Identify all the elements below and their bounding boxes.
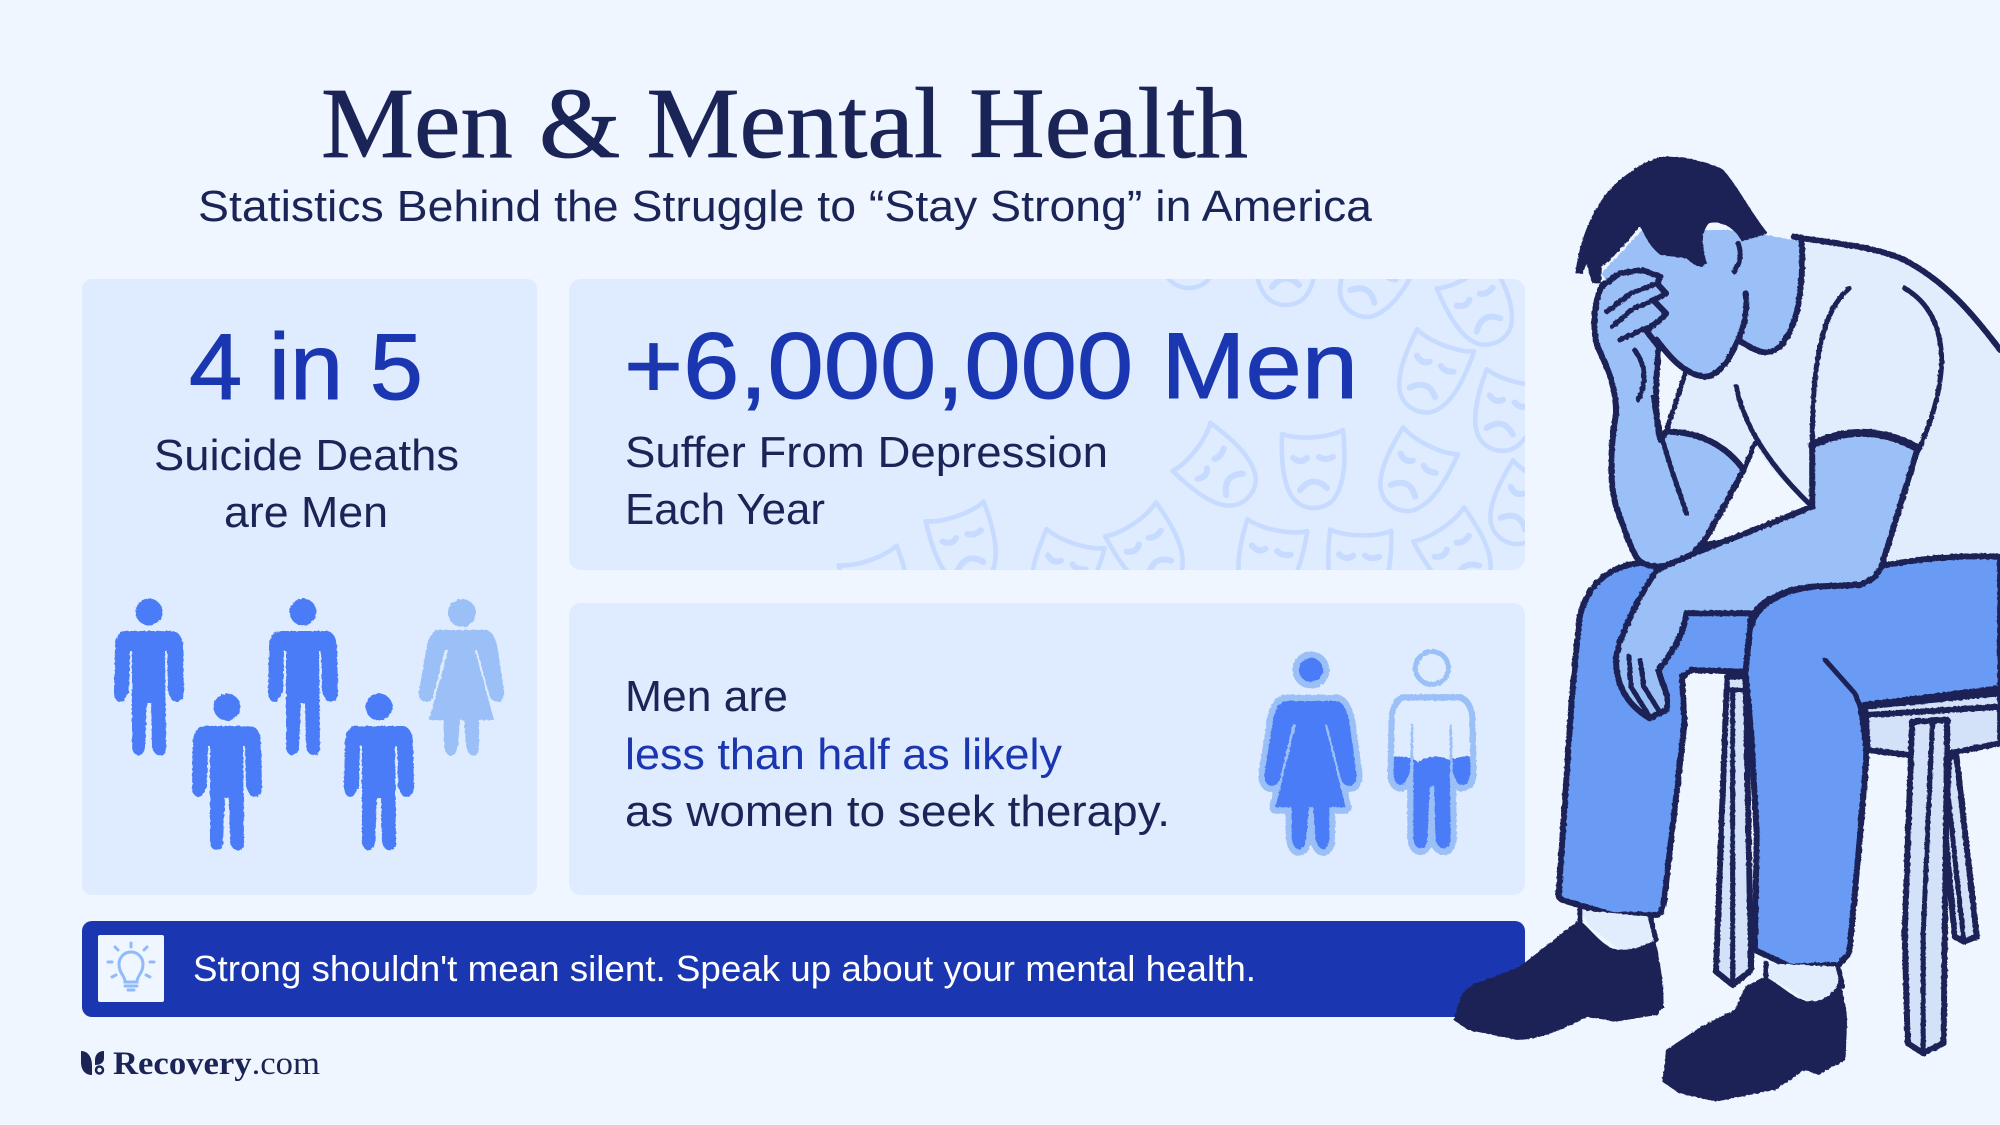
chair	[1716, 677, 2000, 1053]
logo mark	[81, 1051, 104, 1075]
head and neck	[1575, 157, 1802, 377]
shirt	[1666, 237, 2000, 567]
statistic: 4 in 5: 4 in 5	[189, 314, 423, 419]
propping arm and hand	[1594, 270, 1744, 566]
text: men are less than half as likely: less than half as likely	[625, 730, 1062, 779]
label: suffer from depression each year: Suffer From Depression	[625, 428, 1108, 477]
panel: therapy	[569, 603, 1525, 895]
logo: Recovery.com	[81, 1046, 320, 1082]
callout banner	[82, 921, 1525, 1017]
back leg	[1453, 540, 1753, 1040]
text: men are less than half as likely: Men are	[625, 672, 788, 721]
icon: four men and one woman	[114, 598, 504, 850]
statistic: +6,000,000 men: +6,000,000 Men	[624, 313, 1358, 418]
title: Men & Mental Health	[321, 67, 1248, 179]
label: suffer from depression each year: Each Year	[625, 485, 825, 534]
illustration: seated man	[1453, 157, 2000, 1102]
panel: six million men	[569, 279, 1525, 570]
label: suicide deaths are men	[154, 431, 459, 537]
text: men are less than half as likely	[625, 672, 1170, 836]
label: suicide deaths are men: Suicide Deaths	[154, 431, 459, 480]
label: suicide deaths are men: are Men	[224, 488, 388, 537]
subtitle: Statistics Behind the Struggle to “Stay Strong” in America	[198, 182, 1373, 231]
front leg	[1662, 556, 2000, 1102]
panel: 4 in 5	[82, 279, 537, 895]
icon: woman filled and man partly filled	[1264, 652, 1470, 849]
icon: light bulb	[98, 935, 164, 1002]
hanging arm and hand	[1616, 433, 1918, 718]
decorative sad masks	[837, 210, 1569, 637]
text: men are less than half as likely: as women to seek therapy.	[625, 787, 1170, 836]
label: suffer from depression each year	[625, 428, 1108, 534]
callout text: Strong shouldn't mean silent. Speak up about your mental health.	[193, 948, 1256, 989]
logo wordmark: Recovery.com	[113, 1046, 320, 1082]
